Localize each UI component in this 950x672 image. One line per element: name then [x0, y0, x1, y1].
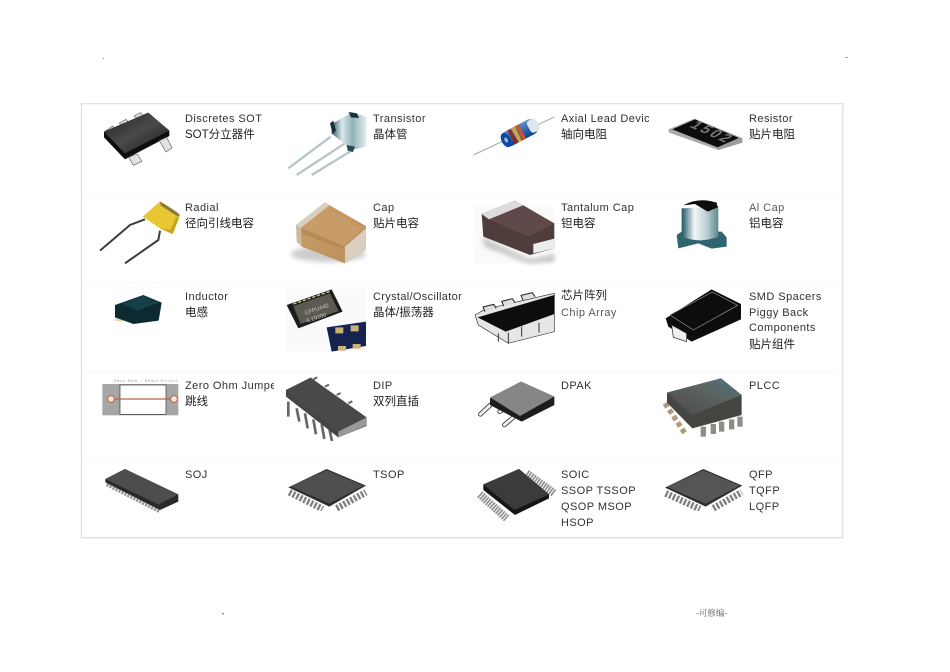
label: SOIC: HSOP: [561, 517, 594, 529]
label: Axial Lead Device: 轴向电阻: [561, 127, 607, 141]
footer mark: left dot: [222, 613, 224, 614]
cell: QFP: [665, 469, 780, 513]
cell: Chip Array: [475, 288, 617, 343]
label: SOIC: [561, 469, 636, 529]
label: SMD Spacers: 贴片组件: [749, 337, 795, 351]
label: Discretes SOT: SOT分立器件: [185, 127, 255, 141]
icon: SOIC package: [480, 469, 554, 518]
cell: PLCC: [665, 378, 780, 437]
label: SMD Spacers: SMD Spacers: [749, 291, 822, 303]
icon: TSOP package: [288, 469, 366, 509]
label: DIP: [373, 380, 419, 408]
label: Zero Ohm Jumper: Zero Ohm Jumper: [185, 380, 281, 392]
icon: SOJ package: [105, 469, 178, 512]
label: Radial: [185, 202, 254, 230]
label: Discretes SOT: Discretes SOT: [185, 113, 262, 125]
label: Zero Ohm Jumper: [185, 381, 274, 406]
label: SOJ: SOJ: [185, 469, 208, 481]
icon: aluminium capacitor: [677, 200, 727, 249]
icon: DIP package: [286, 377, 367, 441]
label: Transistor: 晶体管: [373, 127, 408, 141]
label: QFP: QFP: [749, 469, 773, 481]
label: Chip Array: Chip Array: [561, 307, 617, 319]
label: Radial: 径向引线电容: [185, 216, 254, 230]
icon: SMD spacer: [666, 289, 741, 342]
label: Al Cap: Al Cap: [749, 202, 785, 214]
icon: SOT package: [104, 113, 172, 165]
label: Resistor: 贴片电阻: [749, 127, 795, 141]
label: SOIC: SOIC: [561, 469, 590, 481]
label: SMD Spacers: Components: [749, 322, 816, 334]
label: Al Cap: [749, 202, 785, 230]
cell: DIP: [286, 377, 419, 441]
label: Axial Lead Device: Axial Lead Device: [561, 113, 657, 125]
icon: DPAK package: [480, 382, 554, 425]
cell: Tantalum Cap: [473, 201, 634, 263]
page mark: top left dot: [103, 58, 104, 59]
icon: radial capacitor: [100, 201, 180, 263]
label: Axial Lead Device: [561, 114, 649, 140]
label: DIP: DIP: [373, 380, 393, 392]
label: DIP: 双列直插: [373, 394, 419, 408]
label: Inductor: [185, 291, 228, 319]
cell: SOJ: [105, 469, 208, 512]
label: Cap: Cap: [373, 202, 395, 214]
label: Tantalum Cap: Tantalum Cap: [561, 202, 634, 214]
label: Transistor: Transistor: [373, 113, 426, 125]
label: Cap: 贴片电容: [373, 216, 419, 230]
icon: inductor: [115, 295, 162, 324]
icon: QFP package: [665, 469, 742, 509]
label: PLCC: PLCC: [749, 380, 780, 392]
cell: Resistor: [668, 113, 795, 150]
label: SOIC: SSOP TSSOP: [561, 485, 636, 497]
label: Resistor: Resistor: [749, 113, 793, 125]
label: Al Cap: 铝电容: [749, 216, 784, 230]
label: Resistor: [749, 113, 795, 141]
icon: crystal oscillators: CFPU440: [304, 303, 330, 317]
cell: SOIC: [480, 469, 636, 529]
infographic: component package chart: [81, 57, 848, 617]
icon: axial resistor: [473, 116, 555, 155]
label: Zero Ohm Jumper: 跳线: [185, 394, 208, 408]
label: QFP: TQFP: [749, 485, 780, 497]
icon: chip resistor: 1502: [686, 118, 736, 145]
icon: crystal oscillators: [287, 288, 367, 352]
label: QFP: LQFP: [749, 501, 780, 513]
label: Cap: [373, 202, 419, 230]
footer text: -可修编-: [696, 608, 727, 618]
label: Chip Array: 芯片阵列: [561, 288, 607, 302]
cell: Transistor: [288, 112, 426, 175]
icon: crystal oscillators: 6.19200: [306, 313, 327, 325]
cell: SMD Spacers: [666, 289, 822, 351]
icon: chip array: [475, 293, 554, 343]
icon: tantalum capacitor: [473, 201, 554, 263]
label: Tantalum Cap: 钽电容: [561, 216, 596, 230]
cell: TSOP: [288, 469, 405, 509]
label: Inductor: Inductor: [185, 291, 228, 303]
cell: Zero Ohm Jumper: [102, 379, 281, 415]
label: Crystal/Oscillator: 晶体/振荡器: [373, 305, 434, 319]
icon: ceramic chip capacitor: [291, 202, 366, 263]
label: Chip Array: [561, 288, 617, 319]
icon: zero ohm jumper diagram: [102, 379, 178, 415]
chart frame: [82, 104, 843, 538]
cell: Al Cap: [677, 200, 785, 249]
label: SMD Spacers: [749, 291, 822, 351]
label: DPAK: DPAK: [561, 380, 592, 392]
label: Radial: Radial: [185, 202, 219, 214]
label: Tantalum Cap: [561, 202, 634, 230]
icon: PLCC package: [665, 378, 742, 437]
cell: Discretes SOT: [104, 113, 262, 165]
page mark: top right dot: [846, 57, 848, 58]
cell: Crystal/Oscillator: [287, 288, 462, 352]
label: SMD Spacers: Piggy Back: [749, 307, 809, 319]
label: Discretes SOT: [185, 113, 262, 141]
label: Inductor: 电感: [185, 305, 208, 319]
label: SOIC: QSOP MSOP: [561, 501, 632, 513]
icon: transistor can: [288, 112, 367, 175]
label: Crystal/Oscillator: [373, 291, 462, 319]
label: QFP: [749, 469, 780, 513]
cell: Axial Lead Device: [473, 113, 657, 155]
cell: Inductor: [115, 291, 228, 324]
label: TSOP: TSOP: [373, 469, 405, 481]
label: Crystal/Oscillator: Crystal/Oscillator: [373, 291, 462, 303]
cell: Radial: [100, 201, 254, 263]
icon: zero ohm jumper diagram: Zero Ohm - Short Circuit: [114, 379, 177, 383]
cell: DPAK: [480, 380, 592, 425]
label: Transistor: [373, 113, 426, 141]
cell: Cap: [291, 202, 419, 263]
